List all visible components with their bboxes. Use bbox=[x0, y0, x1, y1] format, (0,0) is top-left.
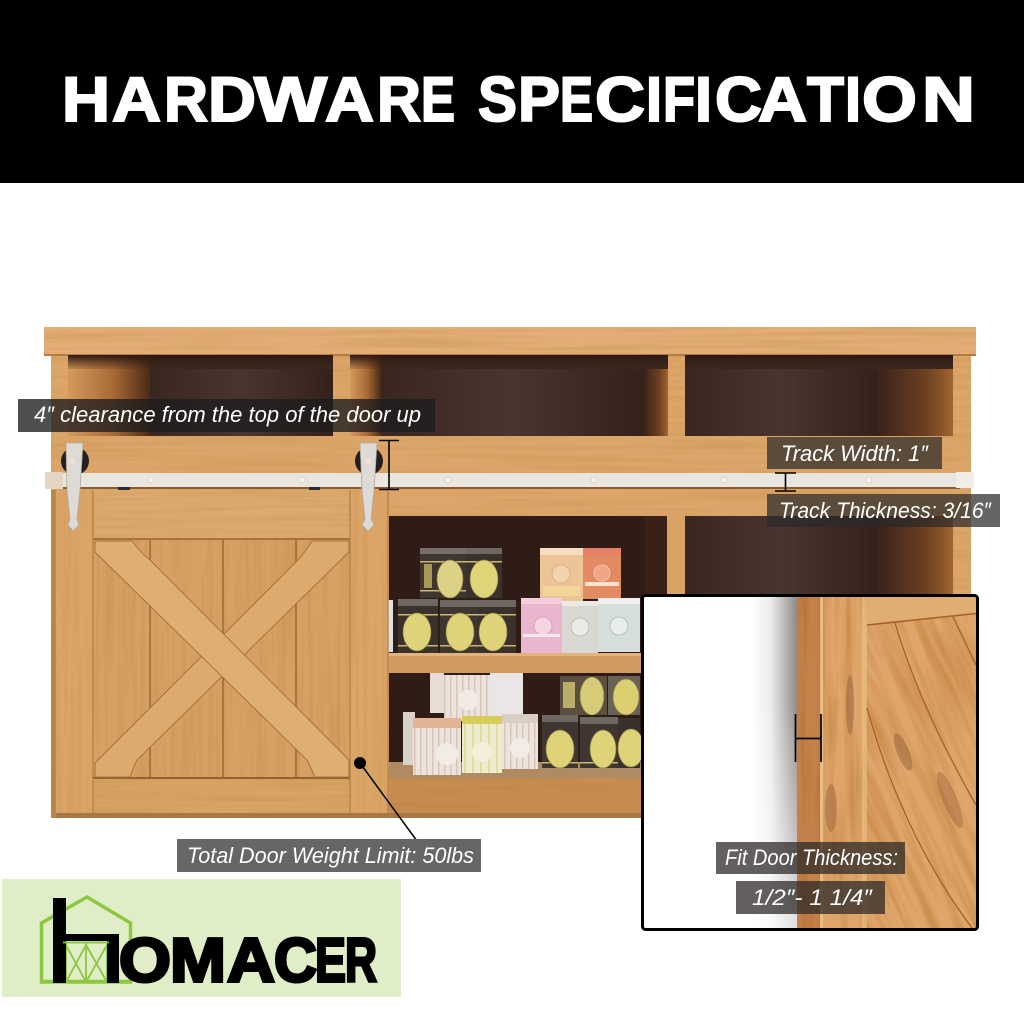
title: N bbox=[922, 65, 975, 135]
bottom rail bbox=[93, 777, 350, 813]
diagonal plank lines bbox=[867, 617, 976, 928]
title: C bbox=[715, 65, 762, 135]
title: R bbox=[377, 65, 421, 135]
left hanger bbox=[66, 443, 83, 531]
callout: track thickness: Track Thickness: 3/16″ bbox=[779, 498, 992, 523]
callout: thickness range: 1/2″- 1 1/4″ bbox=[752, 885, 873, 910]
track thickness marker bbox=[775, 473, 796, 491]
upper left opening bbox=[68, 355, 333, 436]
door top rail closeup bbox=[866, 596, 976, 625]
logo wordmark: C bbox=[274, 926, 317, 996]
title: A bbox=[325, 65, 374, 135]
logo wordmark: R bbox=[345, 926, 377, 996]
door panel bbox=[93, 540, 350, 778]
lower middle opening bbox=[389, 516, 685, 778]
title: I bbox=[646, 65, 662, 135]
title: O bbox=[862, 65, 917, 135]
title: A bbox=[758, 65, 807, 135]
callout: track width bbox=[767, 437, 942, 469]
shelf bbox=[389, 653, 641, 673]
clearance dimension marker bbox=[379, 440, 399, 490]
title: F bbox=[663, 65, 695, 135]
title: I bbox=[695, 65, 712, 135]
barn door bbox=[51, 490, 388, 818]
callout: thickness range bbox=[736, 881, 885, 914]
title: W bbox=[254, 65, 328, 135]
panel: cabinet bbox=[44, 327, 976, 818]
lower shelf white tins bbox=[403, 673, 538, 775]
upper right opening bbox=[685, 355, 953, 436]
logo wordmark: A bbox=[227, 926, 275, 996]
logo wordmark: M bbox=[170, 926, 226, 996]
upper middle opening bbox=[350, 355, 668, 436]
icon: H letterform bbox=[53, 898, 119, 983]
bottom shelf bbox=[51, 762, 641, 818]
door wood closeup bbox=[797, 597, 976, 928]
track bolts bbox=[148, 477, 872, 483]
logo wordmark: O bbox=[119, 926, 171, 996]
icon: barn outline bbox=[40, 897, 132, 982]
title: H bbox=[62, 65, 110, 135]
title: I bbox=[845, 65, 861, 135]
upper shelf dark tins bbox=[388, 548, 516, 653]
thickness marker bbox=[795, 714, 821, 762]
right track wheel bbox=[355, 447, 383, 475]
right hanger bbox=[360, 443, 377, 531]
title: E bbox=[421, 65, 455, 135]
title: R bbox=[164, 65, 208, 135]
x brace bbox=[95, 541, 349, 777]
title: P bbox=[518, 65, 560, 135]
callout: track width: Track Width: 1″ bbox=[781, 441, 929, 466]
title: C bbox=[595, 65, 645, 135]
sliding track bbox=[45, 472, 974, 490]
top rail bbox=[93, 490, 350, 540]
inset border bbox=[642, 596, 978, 930]
title: E bbox=[560, 65, 593, 135]
upper shelf pastel tins bbox=[521, 548, 640, 653]
door edge shadow bbox=[760, 597, 797, 928]
top board bbox=[44, 327, 976, 356]
logo door rail bbox=[63, 942, 109, 944]
title: S bbox=[478, 65, 517, 135]
panel: door thickness inset bbox=[641, 594, 979, 931]
title: D bbox=[208, 65, 256, 135]
logo bbox=[2, 879, 401, 997]
lower right opening bbox=[685, 516, 953, 596]
track end stops bbox=[45, 472, 974, 489]
title banner bbox=[0, 0, 1024, 183]
callout: clearance: 4″ clearance from the top of the door up bbox=[34, 402, 421, 427]
title: T bbox=[807, 65, 844, 135]
icon: barn door bbox=[63, 942, 109, 983]
logo wordmark: E bbox=[315, 926, 346, 996]
weight leader line bbox=[354, 757, 417, 841]
title: A bbox=[112, 65, 161, 135]
lower shelf dark tins bbox=[542, 676, 644, 768]
left track wheel bbox=[61, 447, 89, 475]
callout: fit door thickness: Fit Door Thickness: bbox=[725, 845, 898, 870]
tea tins bbox=[388, 548, 644, 775]
callout: door weight: Total Door Weight Limit: 50lbs bbox=[187, 843, 474, 868]
